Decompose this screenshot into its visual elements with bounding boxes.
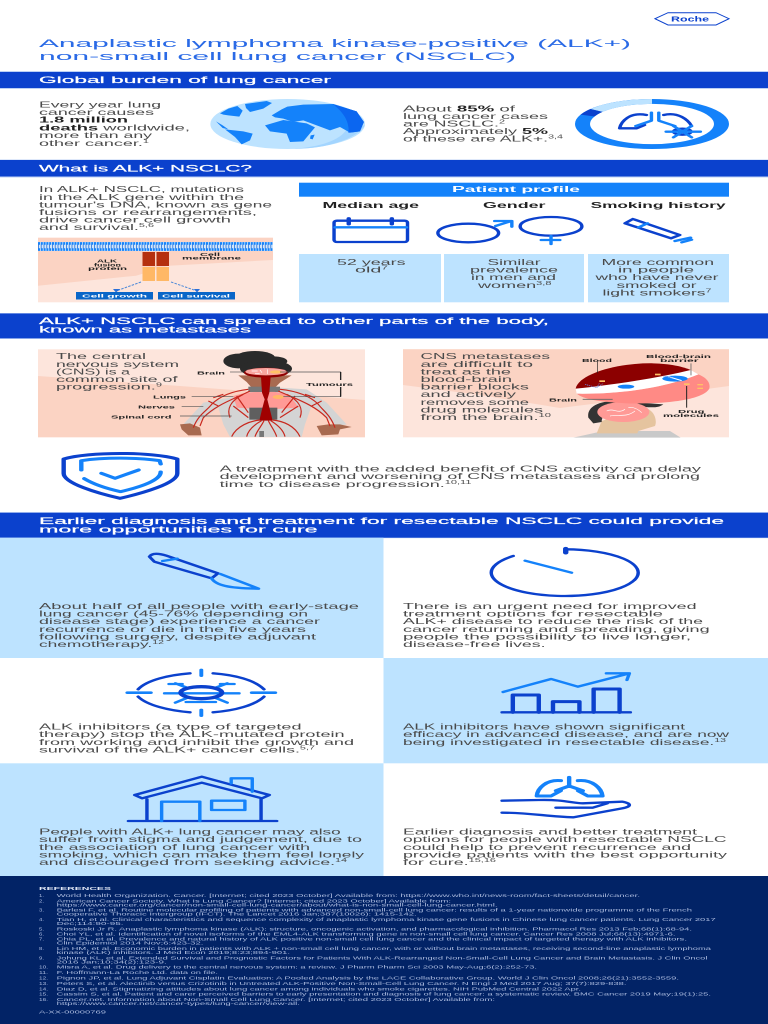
- text: better options: for cure.: [403, 858, 433, 867]
- text: ALK explanation: tumour's DNA, known as gene: [39, 200, 273, 210]
- panel: blood-brain barrier: [403, 349, 729, 438]
- reference numbers: 4.: [39, 917, 44, 922]
- panel: patient profile: [299, 183, 729, 302]
- patient profile header: Patient profile: [452, 185, 582, 194]
- reference list: F. Hoffmann-La Roche Ltd. data on file.: [57, 970, 218, 975]
- illustration: brain and barrier: [573, 362, 710, 438]
- reference list: [57, 893, 717, 1006]
- text: ALK explanation: [39, 185, 273, 232]
- text: ALK inhibitors: [39, 722, 355, 754]
- text: efficacy: efficacy in advanced disease, and are now: [403, 730, 729, 739]
- diagram: ALK fusion protein: Cell: [200, 252, 221, 258]
- text: NSCLC share: of these are ALK+.: [403, 134, 471, 144]
- illustration: body with nerves: [180, 351, 352, 437]
- body labels: Tumours: [306, 382, 354, 388]
- text: NSCLC share: are NSCLC.: [403, 120, 447, 128]
- reference numbers: 3.: [39, 908, 44, 913]
- diagram: ALK fusion protein: membrane: [182, 256, 242, 262]
- text: better options: [403, 828, 729, 867]
- text: ALK explanation: and survival.: [39, 223, 85, 232]
- text: stigma: smoking, which can make them feel lonely: [39, 850, 366, 860]
- text: stigma: the association of lung cancer with: [39, 843, 311, 852]
- text: yearly deaths: 1.8 million: [39, 116, 128, 125]
- card: gender: 3,8: [536, 281, 552, 287]
- text: urgent need: [403, 602, 711, 649]
- text: ALK inhibitors: survival of the ALK+ cancer cells.: [39, 746, 159, 754]
- section heading: what is ALK+: What is ALK+ NSCLC?: [39, 164, 252, 174]
- panel: references: [0, 876, 768, 1024]
- reference list: Johung KL, et al. Extended Survival and Prognostic Factors for Patients With ALK-Rearranged Non-Small-Cell Lung Cancer and Brain Metastasis. J Clin Oncol: [57, 955, 708, 960]
- card: gender: in men and: [471, 273, 557, 282]
- text: ALK explanation: 5,6: [139, 223, 154, 229]
- reference numbers: 8.: [39, 946, 44, 951]
- logo: Roche: [655, 13, 729, 25]
- text: ALK explanation: fusions or rearrangements,: [39, 208, 257, 217]
- text: CNS activity benefit: time to disease progression.: [220, 480, 322, 489]
- reference numbers: 12.: [39, 975, 48, 980]
- text: urgent need: treatment options for resectable: [403, 610, 664, 618]
- text: recurrence: chemotherapy.: [39, 640, 93, 649]
- icon: globe: [210, 99, 365, 149]
- icon: scalpel: [149, 554, 259, 589]
- reference list: Cancer.net. Information about Non-Small Cell Lung Cancer. [Internet; cited 2023 October] Available from:: [57, 997, 495, 1002]
- barrier labels: [549, 354, 720, 419]
- body labels: Lungs: [153, 395, 187, 401]
- text: efficacy: [403, 722, 729, 747]
- text: recurrence: lung cancer (45-76% depending on: [39, 610, 309, 618]
- text: CNS metastases: blood-brain: [420, 375, 513, 384]
- text: CNS metastases: are difficult to: [420, 360, 534, 369]
- card: median age: 52 years: [337, 258, 406, 267]
- text: CNS activity benefit: 10,11: [445, 480, 472, 486]
- text: CNS metastases: CNS metastases: [420, 352, 550, 361]
- reference list: Peters S, et al. Alectinib versus Crizotinib in Untreated ALK-Positive Non-Small-Cell Lung Cancer. N Engl J Med 2017 Aug; 37(7):829-838.: [57, 981, 627, 986]
- text: ALK inhibitors: 5,7: [300, 746, 315, 752]
- reference list: kinase (ALK) inhibitors. J Med Econ 2019;8:23;894-901.: [57, 950, 290, 955]
- reference numbers: 6.: [39, 931, 44, 936]
- diagram: ALK fusion protein: fusion: [94, 262, 121, 268]
- text: yearly deaths: 1: [143, 139, 149, 145]
- column headings: Smoking history: [591, 201, 727, 210]
- section heading: metastases: ALK+ NSCLC can spread to other parts of the body,: [39, 316, 549, 326]
- card: smoking history: light smokers: [602, 288, 651, 298]
- text: ALK inhibitors: therapy) stop the ALK-mutated protein: [39, 730, 346, 739]
- text: NSCLC share: Approximately 5%: [403, 127, 550, 136]
- text: urgent need: cancer returning and spreading, giving: [403, 625, 711, 634]
- text: CNS site: progression.: [56, 382, 101, 392]
- text: yearly deaths: deaths worldwide,: [39, 124, 190, 132]
- reference numbers: [39, 893, 48, 1002]
- reference list: https://www.cancer.org/cancer/non-small-cell-lung-cancer/about/what-is-non-small-cell-lung-cancer.html.: [57, 902, 497, 907]
- patient profile header: [299, 183, 729, 197]
- text: better options: provide patients with the best opportunity: [403, 850, 729, 860]
- reference list: https://www.cancer.net/cancer-types/lung-cancer/view-all.: [57, 1001, 300, 1006]
- text: efficacy: being investigated in resectable disease.: [403, 738, 550, 747]
- reference numbers: 15.: [39, 992, 48, 997]
- reference numbers: 9.: [39, 955, 44, 960]
- icon: clock: [491, 549, 638, 596]
- text: ALK explanation: in the ALK gene within the: [39, 193, 245, 202]
- text: CNS metastases: drug molecules: [420, 406, 543, 414]
- text: NSCLC share: 2: [499, 120, 505, 126]
- reference list: Choi YL, et al. Identification of novel isoforms of the EML4-ALK transforming gene in non-small cell lung cancer. Cancer Res 2008 Jul;68(13):4971-6.: [57, 931, 676, 936]
- text: stigma: People with ALK+ lung cancer may also: [39, 828, 342, 836]
- references heading: REFERENCES: [39, 886, 112, 891]
- body labels: Nerves: [138, 405, 176, 411]
- barrier labels: Drug: [678, 409, 705, 415]
- panel: ALK inhibitors mechanism: [39, 670, 355, 754]
- reference list: Lin HM, et al. Economic burden in patients with ALK + non-small cell lung cancer, with or without brain metastases, receiving second-line anaplastic lymphoma: [57, 946, 712, 951]
- text: urgent need: ALK+ disease to reduce the risk of the: [403, 617, 704, 626]
- text: better options: could help to prevent recurrence and: [403, 843, 692, 852]
- diagram: ALK fusion protein: Cell growth: [82, 294, 147, 298]
- text: stigma: 14: [335, 858, 347, 864]
- text: recurrence: [39, 602, 360, 649]
- text: stigma: and discouraged from seeking advice.: [39, 858, 177, 867]
- icon: gender symbols: [438, 217, 582, 244]
- text: yearly deaths: Every year lung: [39, 100, 162, 110]
- diagram: ALK fusion protein: ALK: [97, 258, 118, 264]
- panel: CNS progression: [38, 349, 365, 437]
- text: urgent need: disease-free lives.: [403, 640, 546, 649]
- text: yearly deaths: more than any: [39, 131, 154, 140]
- reference numbers: 14.: [39, 986, 48, 991]
- reference numbers: 10.: [39, 965, 48, 970]
- text: recurrence: disease stage) experience a cancer: [39, 617, 321, 626]
- reference numbers: 1.: [39, 893, 44, 898]
- section heading: earlier diagnosis: Earlier diagnosis and treatment for resectable NSCLC could provide: [39, 516, 724, 526]
- reference numbers: 7.: [39, 937, 44, 942]
- text: CNS metastases: removes some: [420, 398, 530, 407]
- reference numbers: 2.: [39, 898, 44, 903]
- chart: donut with lungs: [582, 101, 722, 147]
- text: better options: options for people with resectable NSCLC: [403, 835, 727, 844]
- text: recurrence: recurrence or die in the five years: [39, 625, 306, 634]
- text: CNS metastases: and actively: [420, 390, 518, 399]
- text: efficacy: ALK inhibitors have shown significant: [403, 722, 687, 732]
- section heading: what is ALK+: [0, 160, 768, 178]
- card: smoking history: who have never: [593, 273, 719, 282]
- icon: shield with check: [64, 453, 177, 498]
- section heading: metastases: known as metastases: [39, 324, 252, 334]
- reference list: Clin Epidemiol 2014 Nov;6:423-32.: [57, 941, 203, 946]
- text: NSCLC share: [403, 104, 563, 144]
- card: smoking history: More common: [602, 258, 715, 267]
- text: CNS site: (CNS) is a: [56, 368, 131, 376]
- icon: hand holding lungs: [502, 777, 629, 817]
- text: better options: 15,16: [469, 858, 496, 864]
- title: non-small cell lung cancer (NSCLC): [39, 51, 517, 63]
- text: CNS site: The central: [56, 352, 146, 361]
- icon: calendar: [334, 219, 408, 242]
- text: CNS activity benefit: [220, 464, 703, 489]
- reference numbers: 5.: [39, 926, 44, 931]
- reference list: Cooperative Thoracic Intergroup (IFCT). The Lancet 2016 Jan;387(10026): 1415-142.: [57, 912, 417, 917]
- barrier labels: barrier: [660, 358, 699, 364]
- reference list: World Health Organization. Cancer. [Internet; cited 2023 October] Available from: https://www.who.int/news-room/fact-sheets/detail/cancer.: [57, 893, 640, 898]
- reference numbers: 16.: [39, 997, 48, 1002]
- section heading: global burden: Global burden of lung cancer: [39, 75, 331, 85]
- reference list: Diaz D, et al. Stigmatizing attitudes about lung cancer among individuals who smoke cigarettes. NIH PubMed Central 2022 Apr.: [57, 986, 581, 991]
- document code: A-XX-00000769: [39, 1009, 107, 1014]
- text: ALK inhibitors: from working and inhibit the growth and: [39, 738, 355, 747]
- text: yearly deaths: [39, 100, 190, 148]
- reference numbers: 13.: [39, 981, 48, 986]
- text: efficacy: 13: [714, 738, 726, 744]
- text: NSCLC share: 3,4: [548, 134, 563, 140]
- reference list: Barlesi F, et al. Routine molecular profiling of patients with advanced non-small-cell lung cancer: results of a 1-year nationwide programme of the French: [57, 908, 693, 913]
- text: better options: Earlier diagnosis and better treatment: [403, 828, 699, 836]
- logo: Roche: Roche: [671, 14, 709, 23]
- text: CNS metastases: barrier blocks: [420, 382, 529, 392]
- column headings: [322, 201, 727, 210]
- text: urgent need: There is an urgent need for improved: [403, 602, 697, 611]
- card: gender: prevalence: [470, 266, 559, 274]
- text: CNS metastases: 10: [539, 413, 551, 419]
- panel: efficacy in advanced disease: [384, 658, 768, 763]
- card: smoking history: [588, 254, 729, 302]
- body labels: Brain: [197, 370, 225, 376]
- section heading: metastases: [0, 313, 768, 339]
- icon: cigarette: [625, 219, 692, 242]
- text: recurrence: following surgery, despite adjuvant: [39, 632, 318, 642]
- text: recurrence: About half of all people with early-stage: [39, 602, 360, 611]
- reference numbers: 11.: [39, 970, 48, 975]
- body labels: Spinal cord: [111, 414, 172, 420]
- body labels: [111, 370, 354, 420]
- section heading: earlier diagnosis: more opportunities for cure: [39, 524, 318, 534]
- text: CNS metastases: [420, 352, 551, 422]
- reference list: Cassim S, et al. Patient and carer perceived barriers to early presentation and diagnosis of lung cancer: a systematic review. BMC Cancer 2019 May;19(1):25.: [57, 992, 711, 997]
- reference list: Misra A, et al. Drug delivery to the central nervous system: a review. J Pharm Pharm Sci 2003 May-Aug;6(2):252-73.: [57, 965, 537, 970]
- column headings: Gender: [483, 201, 547, 210]
- card: median age: [299, 254, 441, 302]
- reference list: Dec;114:90-95.: [57, 921, 124, 926]
- section heading: global burden: [0, 71, 768, 89]
- text: CNS site: [56, 352, 179, 392]
- diagram: ALK fusion protein: [38, 238, 273, 302]
- barrier labels: Blood-brain: [646, 354, 711, 360]
- reference list: American Cancer Society. What Is Lung Cancer? [Internet; cited 2023 October] Available from:: [57, 898, 451, 903]
- reference list: Pignon JP, et al. Lung Adjuvant Cisplatin Evaluation: A Pooled Analysis by the LACE Collaborative Group. World J Clin Oncol 2008;26(21):3552-3559.: [57, 975, 679, 980]
- text: stigma: suffer from stigma and judgement, due to: [39, 835, 363, 844]
- text: yearly deaths: cancer causes: [39, 108, 154, 117]
- text: ALK inhibitors: ALK inhibitors (a type of targeted: [39, 722, 302, 732]
- text: CNS activity benefit: A treatment with the added benefit of CNS activity can delay: [220, 464, 703, 474]
- section heading: earlier diagnosis: [0, 512, 768, 538]
- text: NSCLC share: lung cancer cases: [403, 112, 548, 121]
- text: CNS site: nervous system: [56, 360, 179, 369]
- column headings: Median age: [322, 201, 420, 210]
- reference list: Tian H, et al. Clinical characteristics and sequence complexity of anaplastic lymphoma kinase gene fusions in Chinese lung cancer patients. Lung Cancer 2017: [57, 917, 717, 922]
- card: gender: Similar: [488, 258, 541, 267]
- text: stigma: [39, 828, 366, 867]
- text: recurrence: 12: [152, 640, 164, 646]
- text: CNS site: common site of: [56, 375, 179, 384]
- panel: better options: [403, 777, 729, 867]
- diagram: ALK fusion protein: Cell survival: [162, 294, 230, 298]
- title: [39, 38, 632, 63]
- panel: stigma: [0, 763, 384, 876]
- diagram: ALK fusion protein: protein: [88, 266, 127, 272]
- card: gender: [444, 254, 584, 302]
- text: yearly deaths: other cancer.: [39, 139, 86, 148]
- text: CNS metastases: treat as the: [420, 368, 512, 376]
- icon: target on cancer cell: [127, 670, 275, 716]
- text: CNS activity benefit: development and worsening of CNS metastases and prolong: [220, 472, 701, 481]
- panel: recurrence after surgery: [0, 538, 384, 658]
- text: CNS site: 9: [156, 382, 162, 388]
- reference list: 2016 Jan;10;34(2):123-9.: [57, 959, 167, 964]
- card: median age: 7: [381, 266, 389, 272]
- card: smoking history: in people: [618, 266, 695, 274]
- barrier labels: Brain: [549, 397, 577, 403]
- text: ALK explanation: In ALK+ NSCLC, mutations: [39, 185, 244, 194]
- card: median age: old: [355, 266, 366, 274]
- icon: house: [128, 777, 277, 821]
- card: gender: women: [478, 281, 504, 290]
- card: smoking history: 7: [706, 288, 712, 294]
- barrier labels: molecules: [663, 413, 720, 419]
- reference list: Roskoski Jr R. Anaplastic lymphoma kinase (ALK): structure, oncogenic activation, and pharmacological inhibition. Pharmacol Res 2013 Feb;68(1):68-94.: [57, 926, 692, 931]
- title: Anaplastic lymphoma kinase-positive (ALK+): [39, 38, 632, 50]
- icon: bar chart with rising arrow: [502, 673, 630, 712]
- card: smoking history: smoked or: [616, 281, 697, 290]
- barrier labels: Blood: [582, 358, 612, 364]
- text: urgent need: people the possibility to live longer,: [403, 632, 691, 642]
- reference list: Chia PL, et al. Prevalence and natural history of ALK positive non-small cell lung cancer and the clinical impact of targeted therapy with ALK inhibitors.: [57, 937, 687, 942]
- text: ALK explanation: drive cancer cell growth: [39, 216, 232, 224]
- text: CNS metastases: from the brain.: [420, 413, 473, 422]
- text: NSCLC share: About 85% of: [403, 104, 517, 114]
- panel: urgent need: [403, 549, 711, 649]
